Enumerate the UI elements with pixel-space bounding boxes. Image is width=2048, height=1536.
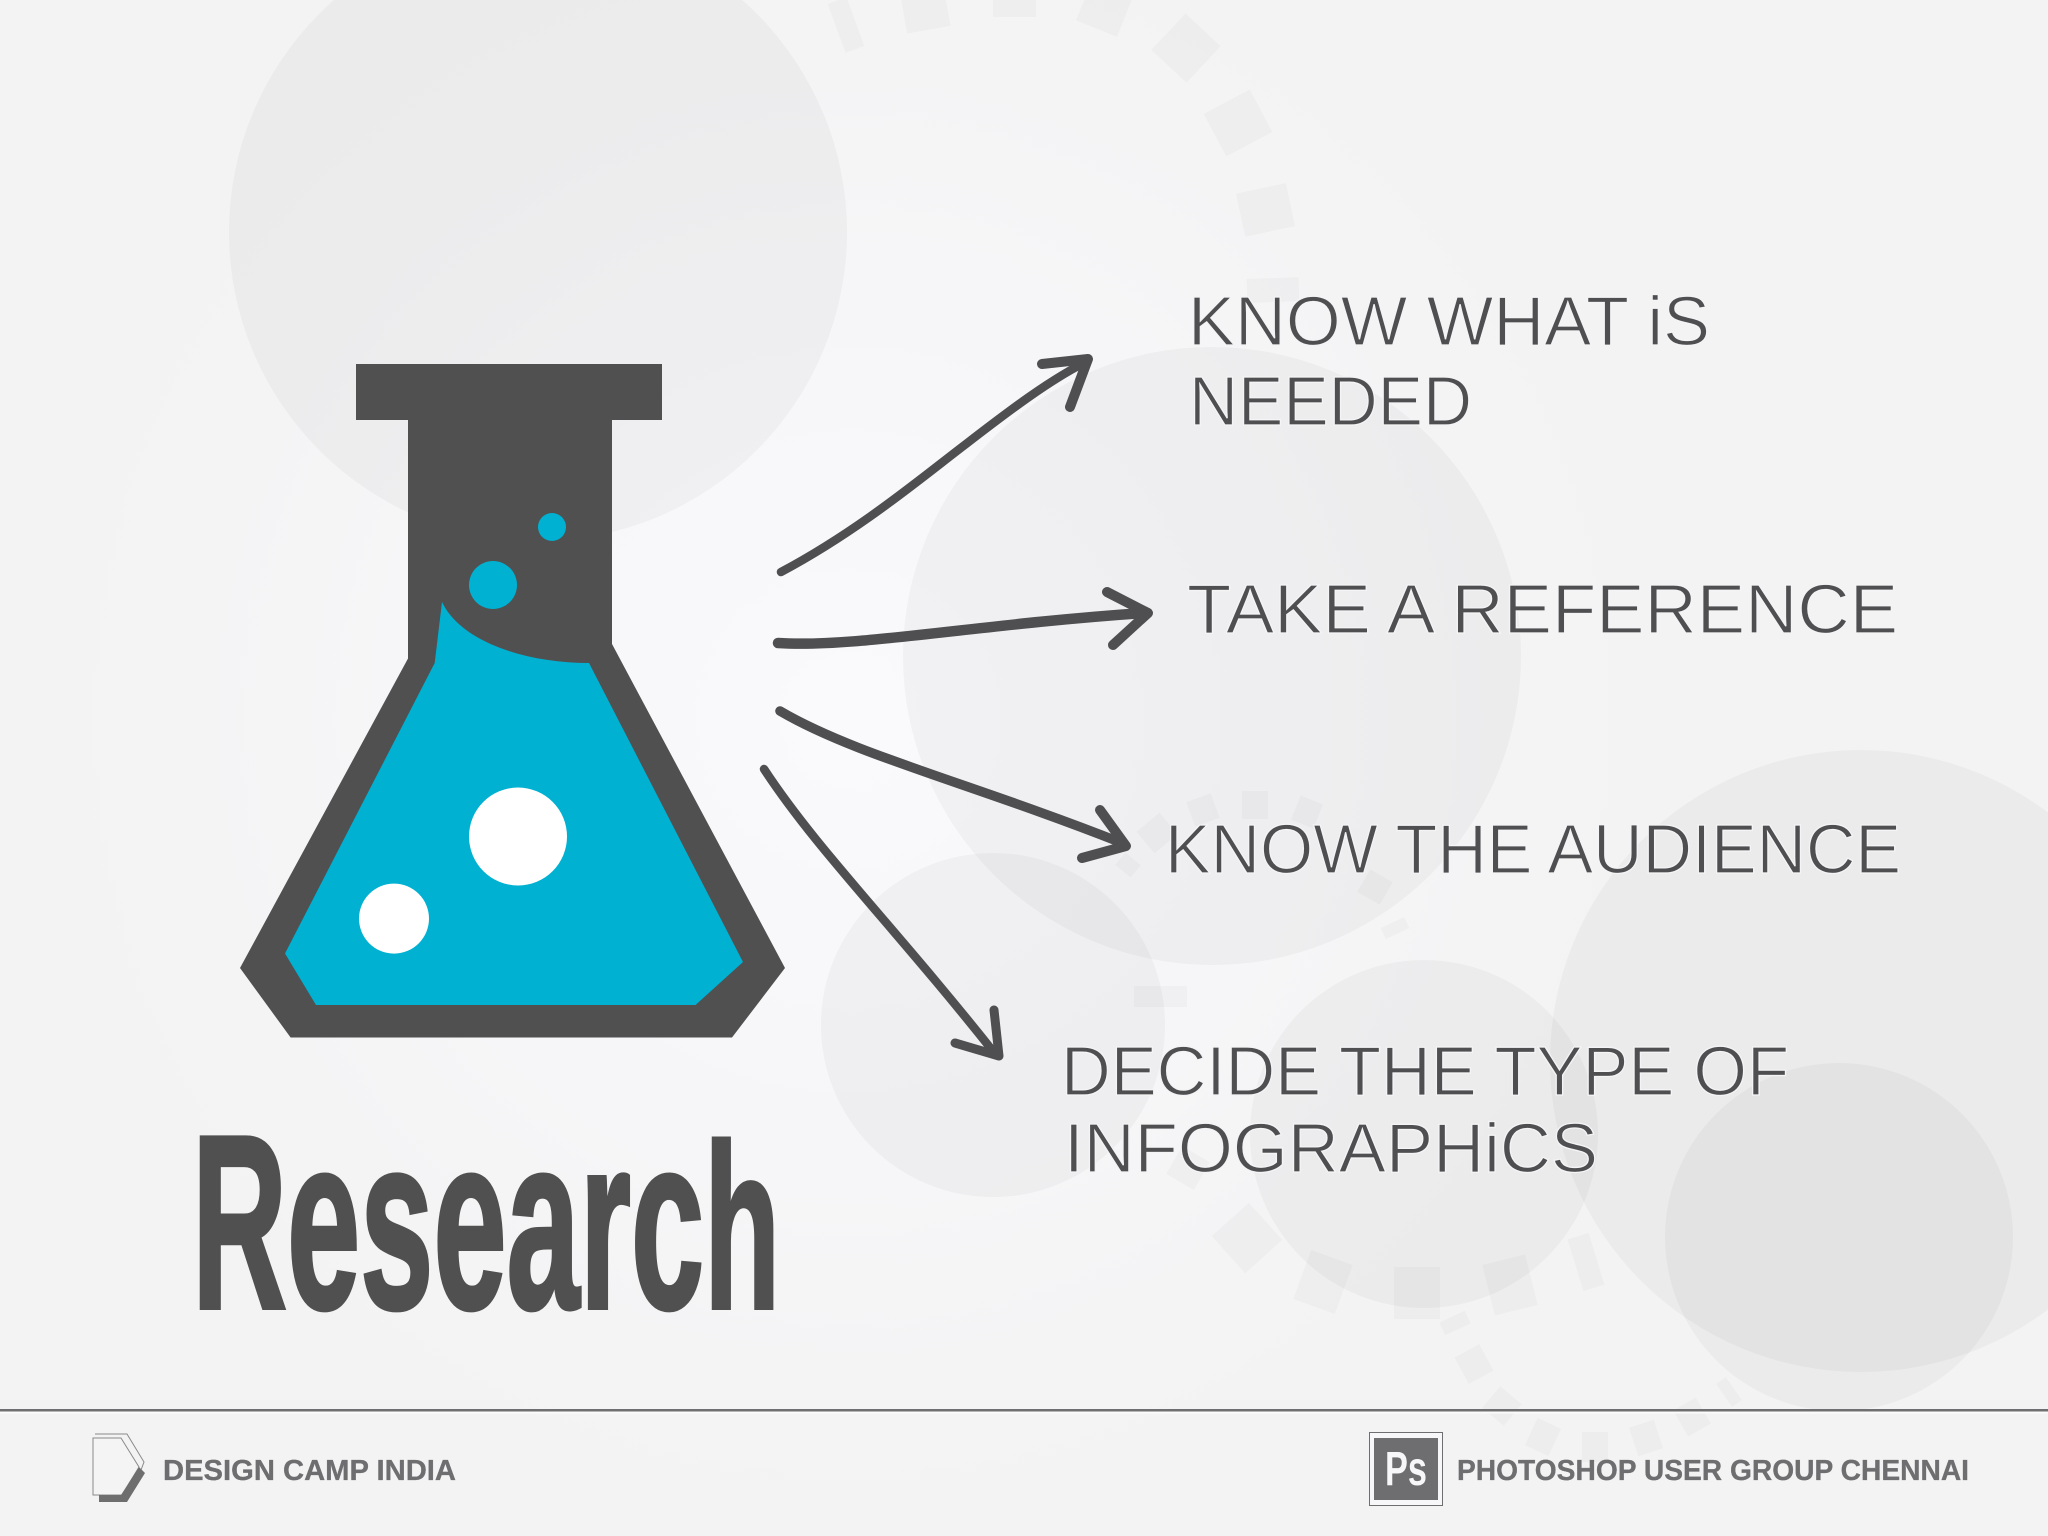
- label: design camp india: DESIGN CAMP INDIA: [163, 1455, 456, 1487]
- arrow: to know what is needed: [781, 359, 1088, 572]
- label: photoshop user group chennai: PHOTOSHOP USER GROUP CHENNAI: [1457, 1455, 1969, 1487]
- arrow: to decide the type: [764, 769, 999, 1056]
- text: know what is needed: KNOW WHAT iS: [1188, 282, 1710, 360]
- icon: photoshop logo: Ps: [1385, 1443, 1427, 1496]
- text: know what is needed: NEEDED: [1189, 362, 1472, 440]
- text: decide the type of infographics: INFOGRAPHiCS: [1064, 1109, 1598, 1187]
- arrow: to know the audience: [780, 711, 1126, 858]
- text: decide the type of infographics: [1061, 1032, 1789, 1187]
- icon: research flask: [240, 364, 785, 1038]
- text: take a reference: TAKE A REFERENCE: [1187, 570, 1898, 648]
- text: know what is needed: [1188, 282, 1710, 440]
- text: decide the type of infographics: DECIDE THE TYPE OF: [1061, 1032, 1789, 1110]
- footer divider: [0, 1409, 2048, 1414]
- arrow: to take a reference: [778, 592, 1148, 645]
- text: know the audience: KNOW THE AUDIENCE: [1165, 810, 1901, 888]
- icon: photoshop logo: [1370, 1432, 1442, 1506]
- icon: design camp india logo: [93, 1434, 145, 1502]
- heading: Research: Research: [192, 1083, 780, 1361]
